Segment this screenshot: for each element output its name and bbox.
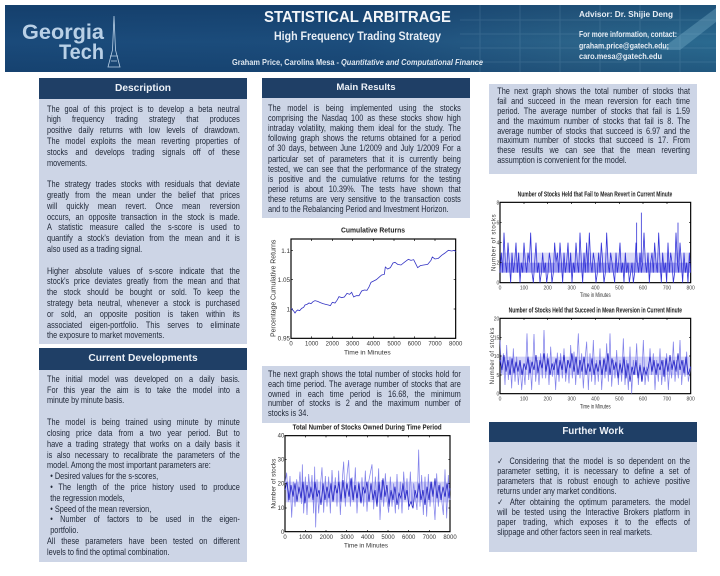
- text block: total stocks: The next graph shows the total number of stocks hold for: [268, 369, 461, 379]
- text block: project goal: The goal of this project is to develop a beta neutral: [47, 104, 239, 114]
- text block: total stocks: number of stocks is 2 and the maximum number of: [268, 398, 461, 408]
- text block: main results: intraday volatility, making them ideal for the study. The: [268, 123, 461, 133]
- text block: strategy: greatly from the mean under the belief that prices: [47, 190, 239, 200]
- text block: main results: and to the Rebalancing Period and Investment Horizon.: [268, 204, 449, 214]
- text block: parameters: have a trading strategy that works on a daily basis it: [47, 439, 239, 449]
- text block: main results: particular set of parameters that it is currently being: [268, 154, 461, 164]
- text block: fail and succeed: maximum number of stocks that succeed is 17. From: [497, 135, 690, 145]
- chart: stocks that fail to mean revert: 2: [497, 261, 500, 267]
- text block: parameters: • Speed of the mean reversion,: [50, 504, 151, 514]
- heading: main results: [262, 78, 470, 98]
- text block: main results: [268, 103, 461, 214]
- text block: fail and succeed: average number of stocks that succeed is 6.97 and the: [497, 126, 690, 136]
- chart: stocks that fail to mean revert: 400: [591, 285, 600, 291]
- chart: stocks that fail to mean revert: 600: [639, 285, 647, 291]
- text block: strategy: will quickly mean revert. Once mean reversion: [47, 201, 239, 211]
- chart: stocks that fail to mean revert: 0: [499, 285, 502, 291]
- text block: total stocks: [268, 369, 461, 418]
- chart: stocks that succeed in mean reversion: 0: [497, 392, 500, 398]
- title: STATISTICAL ARBITRAGE: [264, 9, 451, 26]
- text block: strategy: also used as a trading signal.: [47, 244, 142, 254]
- heading: further work: Further Work: [562, 426, 624, 437]
- contact information: [579, 30, 677, 61]
- chart: cumulative returns: 7000: [428, 342, 442, 348]
- chart: cumulative returns: 1.05: [278, 277, 290, 284]
- chart: cumulative returns: 1.1: [281, 248, 290, 255]
- chart: stocks that succeed in mean reversion: 5: [497, 373, 500, 379]
- chart: total number of stocks owned: Number of stocks: [270, 458, 277, 509]
- chart: total number of stocks owned: 1000: [299, 535, 313, 541]
- text block: initial model: For this year the aim is to take the model into a: [47, 385, 239, 395]
- logo: Georgia Tech: Tech: [59, 41, 104, 64]
- text block: s-score: the exposure to market movements.: [47, 330, 164, 340]
- logo: Georgia Tech: Georgia: [22, 21, 104, 44]
- chart: stocks that succeed in mean reversion: Number of Stocks Held that Succeed in Mean Reversion in Current Minute: [509, 307, 682, 315]
- text block: main results: period is about 10.39%. The tests have shown that: [268, 184, 461, 194]
- chart: total number of stocks owned: 0: [281, 530, 285, 536]
- chart: stocks that succeed in mean reversion: 800: [686, 397, 695, 403]
- chart: cumulative returns: Percentage Cumulative Returns: [270, 239, 277, 337]
- logo: Georgia Tech: [22, 16, 120, 67]
- text block: total stocks: owned in each time period is 16.68, the minimum: [268, 389, 461, 399]
- text block: strategy: occurs, an opposite transaction in the stock is made.: [47, 212, 239, 222]
- chart: stocks that fail to mean revert: 500: [615, 285, 624, 291]
- chart: stocks that succeed in mean reversion: Time in Minutes: [580, 404, 611, 411]
- text block: project goal: high frequency trading strategy that produces: [47, 114, 239, 124]
- chart: stocks that succeed in mean reversion: 100: [520, 397, 528, 403]
- text block: fail and succeed: The next graph shows the total number of stocks that: [497, 86, 690, 96]
- text block: further work: slippage and other factors seen in real markets.: [497, 527, 652, 537]
- chart: stocks that fail to mean revert: 4: [497, 241, 500, 247]
- panel: main results: [262, 78, 470, 218]
- text block: parameters: levels to find the optimal combination.: [47, 547, 169, 557]
- text block: s-score: Higher absolute values of s-score indicate that the: [47, 266, 239, 276]
- chart: stocks that fail to mean revert: Time in Minutes: [580, 292, 611, 299]
- chart: stocks that succeed in mean reversion: 400: [591, 397, 600, 403]
- text block: project goal: The model exploits the mean reverting properties of: [47, 136, 239, 146]
- text block: parameters: • The length of the price history used to produce: [50, 482, 239, 492]
- chart: stocks that succeed in mean reversion: 15: [494, 335, 500, 341]
- text block: parameters: All these parameters have been tested on different: [47, 536, 239, 546]
- chart: cumulative returns: 4000: [367, 342, 381, 348]
- chart: cumulative returns: 1: [286, 306, 290, 313]
- chart: stocks that succeed in mean reversion: 300: [567, 397, 576, 403]
- chart: total number of stocks owned: 4000: [361, 535, 375, 541]
- chart: stocks that fail to mean revert: 0: [497, 281, 500, 287]
- chart: cumulative returns: Time in Minutes: [344, 350, 391, 357]
- chart: total number of stocks owned: [270, 423, 457, 549]
- text block: further work: ✓ Considering that the model is so dependent on the: [497, 456, 690, 466]
- chart: cumulative returns: Cumulative Returns: [341, 225, 405, 234]
- text block: s-score: associated eigen-portfolio. This serves to eliminate: [47, 320, 239, 330]
- heading: main results: Main Results: [336, 82, 396, 93]
- contact information: For more information, contact:: [579, 30, 677, 39]
- chart: cumulative returns: 3000: [346, 342, 360, 348]
- text block: main results: is positive and the cumulative returns for the testing: [268, 174, 461, 184]
- chart: total number of stocks owned: 10: [278, 506, 285, 512]
- text block: total stocks: stocks is 34.: [268, 408, 309, 418]
- text block: further work: paper trading, which exposes it to the effects of: [497, 517, 690, 527]
- panel: total stocks explanation: [262, 366, 470, 423]
- text block: s-score: [47, 266, 240, 340]
- text block: fail and succeed: these results we can see that the mean reverting: [497, 145, 690, 155]
- text block: parameters: • Number of factors to be used in the eigen-: [50, 514, 239, 524]
- text block: project goal: stocks and develops trading signals off of these: [47, 147, 239, 157]
- panel: description: [39, 78, 247, 344]
- chart: cumulative returns: 6000: [408, 342, 422, 348]
- text block: further work: parameter setting, it is necessary to define a set of: [497, 466, 690, 476]
- chart: total number of stocks owned: 6000: [402, 535, 416, 541]
- chart: stocks that fail to mean revert: 300: [567, 285, 576, 291]
- text block: strategy: [47, 179, 240, 254]
- chart: stocks that succeed in mean reversion: 10: [494, 354, 500, 360]
- text block: s-score: the stock should be bought or sold. To keep the: [47, 287, 239, 297]
- chart: stocks that succeed in mean reversion: 0: [499, 397, 502, 403]
- chart: stocks that fail to mean revert: 100: [520, 285, 528, 291]
- text block: project goal: positive daily returns with low levels of drawdown.: [47, 125, 239, 135]
- chart: cumulative returns: 0.95: [278, 336, 290, 343]
- chart: stocks that succeed in mean reversion: Number of stocks: [490, 328, 496, 384]
- chart: stocks that succeed in mean reversion: 700: [663, 397, 671, 403]
- text block: s-score: strategy beta neutral, whenever a stock is purchased: [47, 298, 239, 308]
- text block: project goal: movements.: [47, 158, 87, 168]
- chart: stocks that succeed in mean reversion: 600: [639, 397, 647, 403]
- panel: further work: [489, 422, 697, 552]
- chart: total number of stocks owned: 0: [283, 535, 287, 541]
- contact information: caro.mesa@gatech.edu: [579, 52, 662, 61]
- text block: project goal: [47, 104, 240, 168]
- text block: parameters: closing price data from a two year period. But to: [47, 428, 239, 438]
- advisor: Advisor: Dr. Shijie Deng: [579, 9, 673, 19]
- heading: current developments: [39, 348, 247, 370]
- text block: main results: tested, we can see that the performance of the strategy: [268, 164, 461, 174]
- chart: stocks that fail to mean revert: 6: [497, 221, 500, 227]
- text block: parameters: model. Among the most important parameters are:: [47, 460, 211, 470]
- text block: fail and succeed: period. The average number of stocks that fail is 1.59: [497, 106, 690, 116]
- chart: total number of stocks owned: 8000: [443, 535, 457, 541]
- text block: fail and succeed: fail and succeed in the mean reversion for each time: [497, 96, 690, 106]
- chart: cumulative returns: 8000: [449, 342, 463, 348]
- chart: stocks that succeed in mean reversion: 200: [543, 397, 552, 403]
- chart: total number of stocks owned: 20: [278, 482, 285, 488]
- text block: further work: ✓ After obtaining the optimum parameters. the model: [497, 497, 690, 507]
- text block: fail and succeed: assumption is convenient for the model.: [497, 155, 627, 165]
- panel: current developments: [39, 348, 247, 562]
- chart: total number of stocks owned: 30: [278, 458, 285, 464]
- header banner: [5, 5, 716, 72]
- text block: initial model: minute by minute basis.: [47, 395, 124, 405]
- chart: total number of stocks owned: 5000: [381, 535, 395, 541]
- text block: total stocks: each time period. The average number of stocks that are: [268, 379, 461, 389]
- text block: strategy: quantify a stock's deviation from the mean and it is: [47, 233, 239, 243]
- chart: stocks that succeed in mean reversion: 20: [494, 316, 500, 322]
- text block: strategy: A statistic measure called the s-score is used to: [47, 222, 239, 232]
- chart: stocks that fail to mean revert: Number of stocks: [492, 214, 498, 271]
- text block: strategy: The strategy trades stocks with residuals that deviate: [47, 179, 239, 189]
- chart: stocks that fail to mean revert: 200: [543, 285, 552, 291]
- chart: cumulative returns: 0: [289, 342, 293, 348]
- chart: stocks that fail to mean revert: 700: [663, 285, 671, 291]
- text block: parameters: is also necessary to recalibrate the parameters of the: [47, 450, 239, 460]
- contact information: graham.price@gatech.edu;: [579, 42, 669, 50]
- authors: Graham Price, Carolina Mesa - Quantitative and Computational Finance: [232, 58, 483, 67]
- chart: stocks that fail to mean revert: 800: [686, 285, 695, 291]
- text block: parameters: the regression models,: [50, 493, 124, 503]
- text block: main results: The model is being implemented using the stocks: [268, 103, 461, 113]
- text block: parameters: • Desired values for the s-scores,: [50, 471, 158, 481]
- chart: cumulative returns: 5000: [387, 342, 401, 348]
- chart: total number of stocks owned: Time in Minutes: [344, 542, 389, 549]
- text block: initial model: [47, 374, 240, 405]
- chart: cumulative returns: [270, 225, 463, 357]
- text block: parameters: portfolio.: [50, 525, 78, 535]
- heading: description: Description: [115, 83, 171, 94]
- text block: fail and succeed: [497, 86, 690, 165]
- heading: current developments: Current Developments: [88, 353, 198, 364]
- heading: further work: [489, 422, 697, 442]
- text block: initial model: The initial model was developed on a daily basis.: [47, 374, 239, 384]
- text block: further work: will be tested using the Interactive Brokers platform in: [497, 507, 690, 517]
- chart: total number of stocks owned: 3000: [340, 535, 354, 541]
- chart: stocks that succeed in mean reversion: 500: [615, 397, 624, 403]
- text block: parameters: [47, 417, 240, 557]
- text block: parameters: The model is being trained using minute by minute: [47, 417, 239, 427]
- chart: stocks that fail to mean revert: Number of Stocks Held that Fail to Mean Revert in Current Minute: [518, 190, 673, 199]
- chart: total number of stocks owned: Total Number of Stocks Owned During Time Period: [293, 423, 442, 432]
- text block: main results: following graph shows the returns obtained for a period: [268, 133, 461, 143]
- text block: fail and succeed: and the maximum number of stocks that fail is 8. The: [497, 116, 690, 126]
- text block: main results: of 30 days, between June 1/2009 and July 1/2009 For a: [268, 143, 461, 153]
- text block: main results: these returns are very sensitive to the transaction costs: [268, 194, 461, 204]
- subtitle: High Frequency Trading Strategy: [274, 31, 442, 43]
- text block: further work: returns under any market conditions.: [497, 486, 616, 496]
- heading: description: [39, 78, 247, 99]
- chart: cumulative returns: 1000: [305, 342, 319, 348]
- chart: stocks that fail to mean revert: [491, 190, 695, 299]
- chart: total number of stocks owned: 40: [278, 434, 285, 440]
- panel: fail and succeed explanation: [489, 84, 697, 174]
- text block: s-score: or sold, an opposite position is taken within its: [47, 309, 239, 319]
- chart: total number of stocks owned: 2000: [320, 535, 334, 541]
- chart: stocks that succeed in mean reversion: [490, 307, 695, 411]
- chart: stocks that fail to mean revert: 8: [497, 200, 500, 206]
- chart: total number of stocks owned: 7000: [423, 535, 437, 541]
- text block: further work: [497, 456, 690, 537]
- text block: main results: comprising the Nasdaq 100 as these stocks show high: [268, 113, 461, 123]
- text block: further work: parameters that is robust enough to achieve positive: [497, 476, 690, 486]
- text block: s-score: stock's price deviates greatly from the mean and that: [47, 276, 239, 286]
- chart: cumulative returns: 2000: [326, 342, 340, 348]
